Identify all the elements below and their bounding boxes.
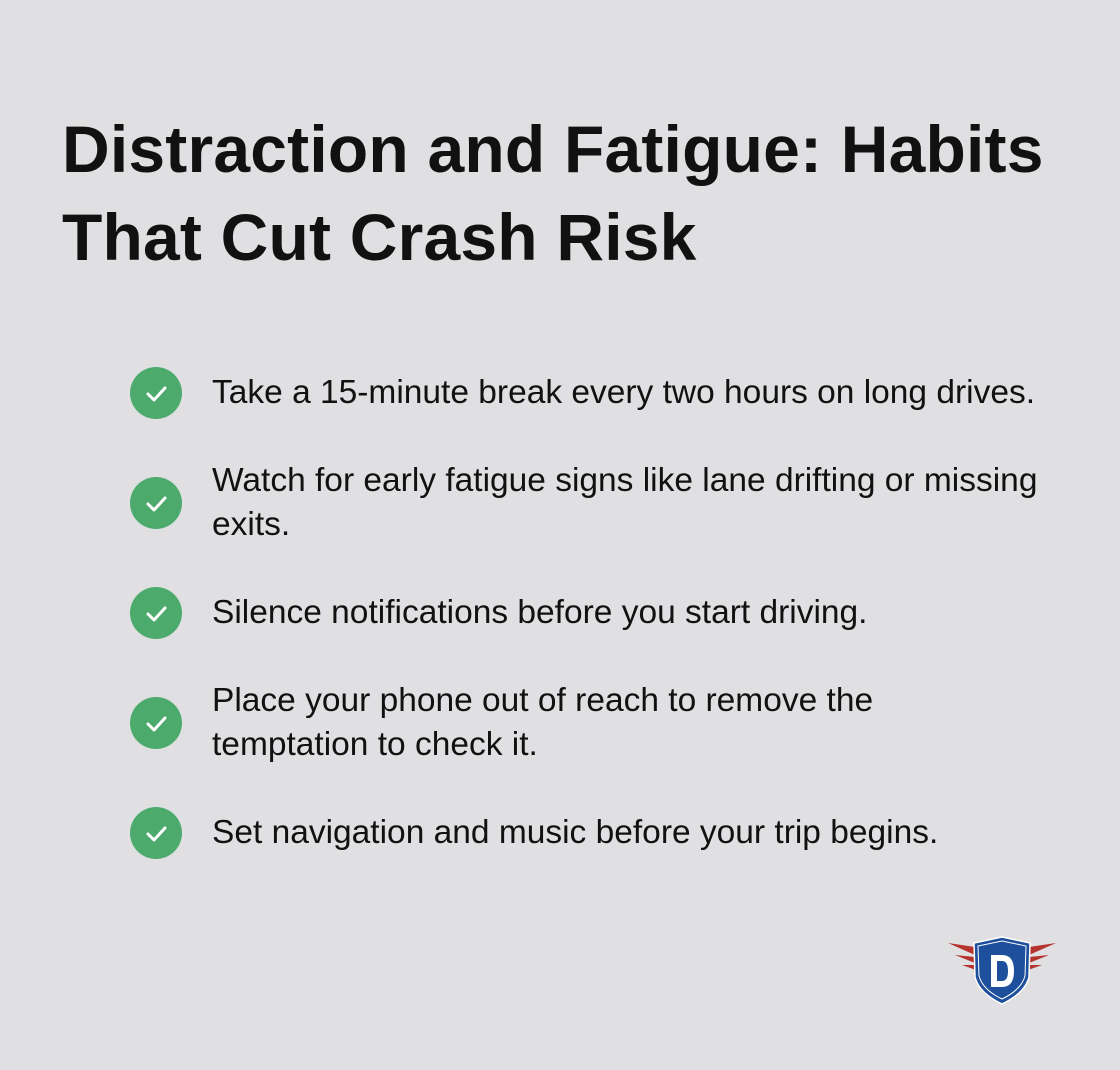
text: Place your phone out of reach to remove the	[212, 682, 873, 719]
text: Take a 15-minute break every two hours on long drives.	[212, 374, 1035, 411]
icon: check	[130, 477, 182, 529]
logo	[948, 936, 1056, 1005]
text: temptation to check it.	[212, 726, 538, 763]
icon: check	[130, 807, 182, 859]
text: Watch for early fatigue signs like lane drifting or missing	[212, 462, 1037, 499]
item 1	[130, 367, 1035, 419]
item 5	[130, 807, 938, 859]
text: Set navigation and music before your trip begins.	[212, 814, 938, 851]
icon: check	[130, 367, 182, 419]
item 4	[130, 682, 873, 763]
item 2	[130, 462, 1037, 543]
icon: check	[130, 587, 182, 639]
text	[212, 462, 1037, 543]
text: exits.	[212, 506, 290, 543]
title: Distraction and Fatigue: Habits	[62, 112, 1044, 186]
icon: check	[130, 697, 182, 749]
title	[62, 112, 1044, 274]
title: That Cut Crash Risk	[62, 200, 697, 274]
text: Silence notifications before you start driving.	[212, 594, 867, 631]
item 3	[130, 587, 867, 639]
text	[212, 682, 873, 763]
